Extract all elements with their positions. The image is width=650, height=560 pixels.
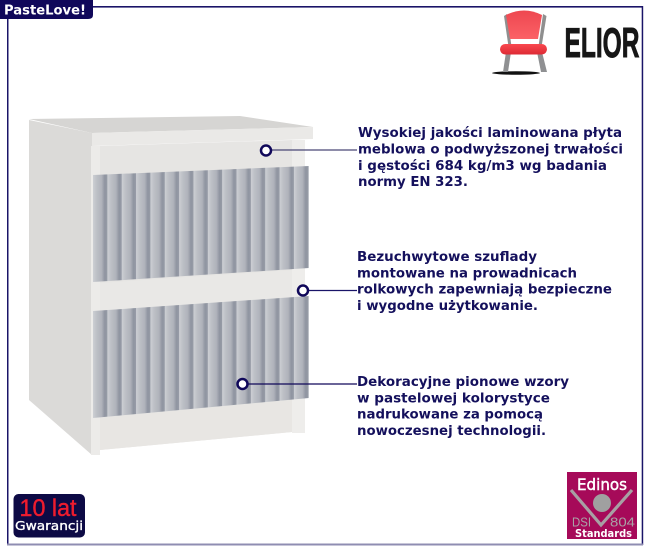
drawer band <box>100 270 292 311</box>
callout 1: laminated board: normy EN 323. <box>358 175 468 190</box>
callout 2: handleless drawers: i wygodne użytkowanie. <box>357 299 538 314</box>
badge: 10 lat warranty: 10 lat <box>20 495 77 522</box>
worktop front edge <box>92 127 313 146</box>
callout 2: handleless drawers: montowane na prowadnicach <box>357 266 577 282</box>
callout 1: laminated board: i gęstości 684 kg/m3 wg badania <box>358 159 607 174</box>
callout 1: laminated board <box>261 126 623 190</box>
bottom plinth <box>100 400 292 450</box>
callout 2: handleless drawers: Bezuchwytowe szuflady <box>357 250 538 265</box>
icon: red chair <box>492 10 547 75</box>
side panel <box>29 120 92 455</box>
badge: Edinos DSI 804 Standards <box>567 472 637 540</box>
brand tag: PasteLove! <box>0 0 93 19</box>
callout 3: decorative patterns: Dekoracyjne pionowe wzory <box>357 375 570 390</box>
lower drawer front <box>93 296 309 418</box>
callout 1: laminated board: Wysokiej jakości laminowana płyta <box>358 126 622 141</box>
badge: Edinos DSI 804 Standards: Edinos <box>577 475 627 494</box>
badge: 10 lat warranty: Gwarancji <box>15 518 83 533</box>
right front post <box>292 140 305 433</box>
upper drawer front <box>93 166 309 282</box>
front carcass <box>100 140 292 450</box>
callout 2: handleless drawers <box>298 250 612 314</box>
callout 3: decorative patterns: w pastelowej kolorystyce <box>357 392 550 406</box>
callout 3: decorative patterns: nowoczesnej technologii. <box>357 424 546 439</box>
badge: Edinos DSI 804 Standards: DSI <box>572 514 591 530</box>
brand tag: PasteLove!: PasteLove! <box>4 4 86 18</box>
foot and left front post <box>91 146 100 455</box>
callout 3: decorative patterns: nadrukowane za pomocą <box>357 408 543 422</box>
callout 2: handleless drawers: rolkowych zapewniają bezpieczne <box>357 282 612 298</box>
furniture: white bedside chest of drawers <box>29 116 313 455</box>
top surface <box>29 116 313 133</box>
badge: Edinos DSI 804 Standards: 804 <box>610 514 635 530</box>
badge: 10 lat warranty <box>14 494 85 538</box>
badge: Edinos DSI 804 Standards: Standards <box>575 527 632 540</box>
callout 3: decorative patterns <box>238 375 570 439</box>
callout 1: laminated board: meblowa o podwyższonej trwałości <box>358 142 623 158</box>
